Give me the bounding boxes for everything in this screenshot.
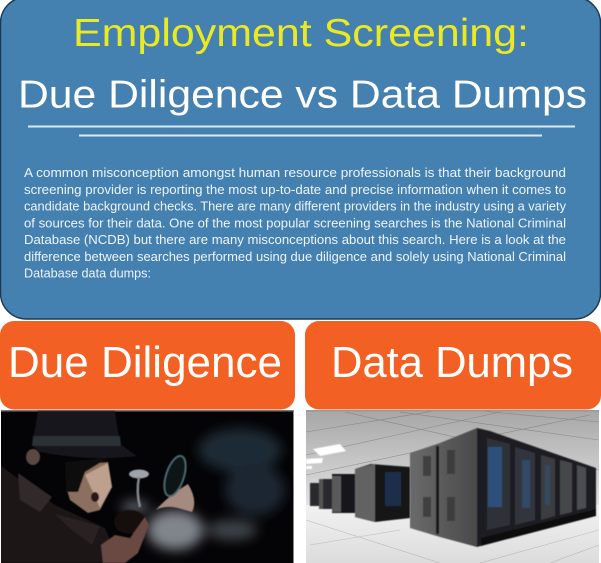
ceiling lights bbox=[306, 444, 346, 469]
text block: introduction: Database data dumps: bbox=[24, 266, 151, 280]
panel: Due Diligence heading bbox=[0, 321, 295, 410]
panel: Data Dumps heading: Data Dumps bbox=[331, 338, 573, 387]
panel: intro header bbox=[0, 0, 600, 319]
hand holding magnifier bbox=[156, 484, 194, 512]
text block: introduction: difference between searches performed using due diligence and solely using National Criminal bbox=[24, 250, 566, 264]
hat bbox=[32, 411, 137, 458]
coat bbox=[0, 465, 120, 563]
text block: introduction: Database (NCDB) but there are many misconceptions about this search. Here is a look at the bbox=[24, 233, 566, 247]
text block: introduction: A common misconception amongst human resource professionals is that their background bbox=[24, 166, 566, 180]
panel: Due Diligence heading: Due Diligence bbox=[8, 338, 282, 387]
main server row bbox=[410, 428, 596, 547]
hair and face bbox=[26, 449, 40, 465]
panel: Data Dumps heading bbox=[305, 321, 601, 410]
smoke wisp bbox=[129, 470, 149, 507]
image: server room bbox=[306, 410, 599, 563]
subtitle: Due Diligence vs Data Dumps: Due Diligence vs Data Dumps bbox=[18, 74, 587, 116]
magnifying glass bbox=[162, 454, 188, 498]
text block: introduction: candidate background checks. There are many different providers in the industry using a variety bbox=[24, 200, 567, 214]
hand holding pipe bbox=[101, 517, 149, 563]
text block: introduction: of sources for their data. One of the most popular screening searches is the National Criminal bbox=[24, 216, 566, 230]
smoke haze bbox=[121, 428, 285, 550]
text block: introduction: screening provider is reporting the most up-to-date and precise information when it comes to bbox=[24, 183, 566, 197]
image: detective with magnifying glass bbox=[0, 409, 295, 563]
pipe bbox=[114, 510, 146, 534]
title: Employment Screening: Employment Screening: bbox=[73, 12, 529, 55]
far server rows bbox=[310, 464, 410, 522]
text block: introduction bbox=[24, 166, 567, 280]
